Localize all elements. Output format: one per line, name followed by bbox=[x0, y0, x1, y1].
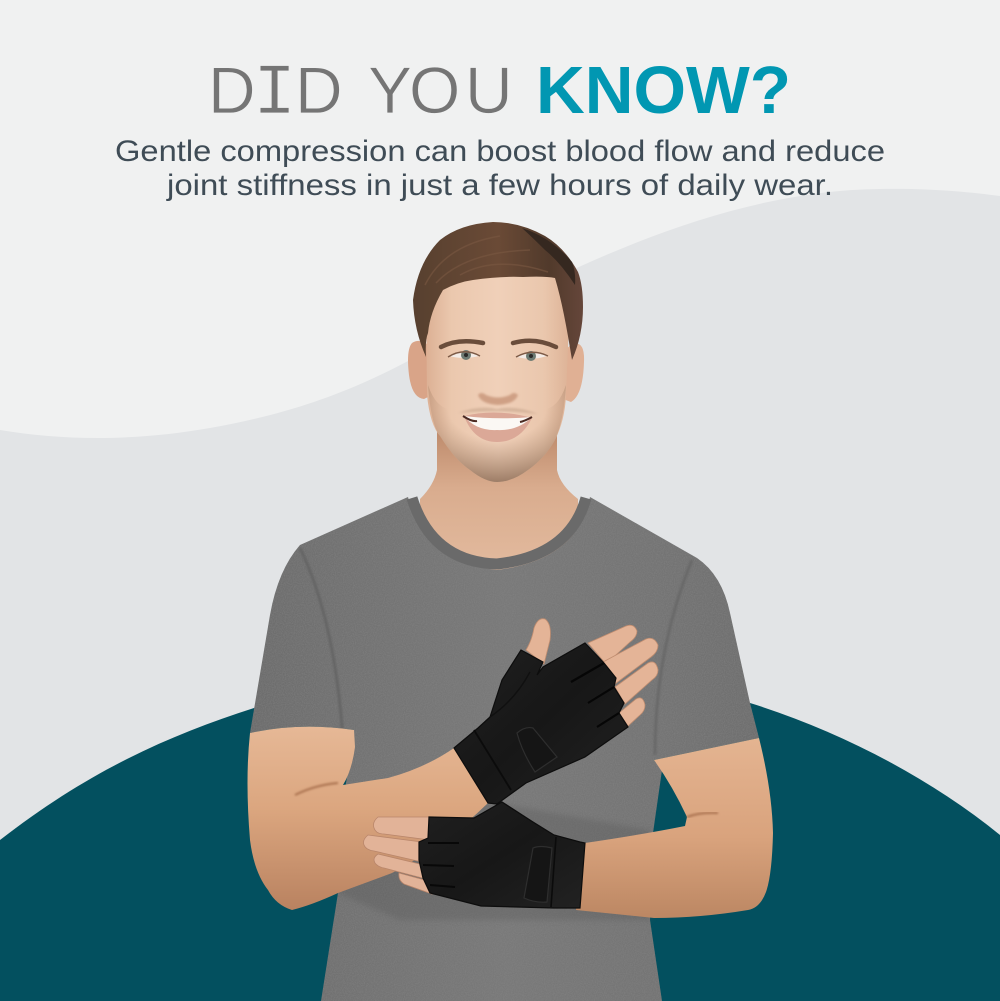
stubble bbox=[428, 385, 566, 482]
lower glove bbox=[419, 802, 585, 908]
lower glove strap bbox=[524, 846, 552, 902]
subtitle text: joint stiffness in just a few hours of daily wear. bbox=[166, 169, 833, 202]
subtitle text bbox=[115, 135, 885, 202]
heading: did you: YOU bbox=[368, 53, 513, 127]
person wearing compression gloves bbox=[248, 222, 773, 1001]
lower hand fingers bbox=[364, 817, 432, 894]
face bbox=[426, 250, 570, 482]
upper glove cuff line bbox=[474, 730, 511, 790]
hair dark side bbox=[522, 228, 575, 285]
heading: did you: D bbox=[295, 53, 343, 127]
eyebrows bbox=[441, 341, 556, 347]
lower glove cuff line bbox=[551, 837, 556, 907]
title bbox=[208, 53, 791, 135]
t-shirt bbox=[250, 497, 759, 1001]
hair bbox=[413, 222, 583, 360]
mouth bbox=[463, 412, 532, 442]
heading: know: KNOW? bbox=[536, 53, 791, 128]
moustache shadow bbox=[458, 408, 538, 414]
heading: did you: D bbox=[208, 53, 256, 127]
upper glove finger slots bbox=[571, 663, 619, 727]
eyes bbox=[448, 350, 548, 361]
subtitle text: Gentle compression can boost blood flow and reduce bbox=[115, 135, 885, 168]
left elbow crease bbox=[295, 783, 338, 795]
upper glove bbox=[454, 643, 628, 804]
shadow under arms bbox=[338, 790, 652, 920]
right ear bbox=[560, 343, 584, 402]
heading: did you: I bbox=[253, 53, 296, 135]
upper glove strap bbox=[517, 728, 557, 772]
hair strands bbox=[425, 236, 548, 285]
upper glove thumb seam bbox=[490, 672, 530, 717]
dome: dark teal bbox=[0, 668, 1000, 1001]
right elbow crease bbox=[687, 813, 718, 817]
lower glove finger slots bbox=[423, 843, 459, 887]
left ear bbox=[408, 341, 432, 399]
upper hand fingers bbox=[526, 619, 658, 726]
left arm (viewer side) bbox=[248, 727, 488, 910]
nose bbox=[478, 393, 518, 405]
collar bbox=[412, 498, 586, 564]
neck bbox=[420, 430, 578, 575]
sleeve seams bbox=[300, 548, 343, 740]
right arm (viewer side) bbox=[576, 738, 773, 918]
